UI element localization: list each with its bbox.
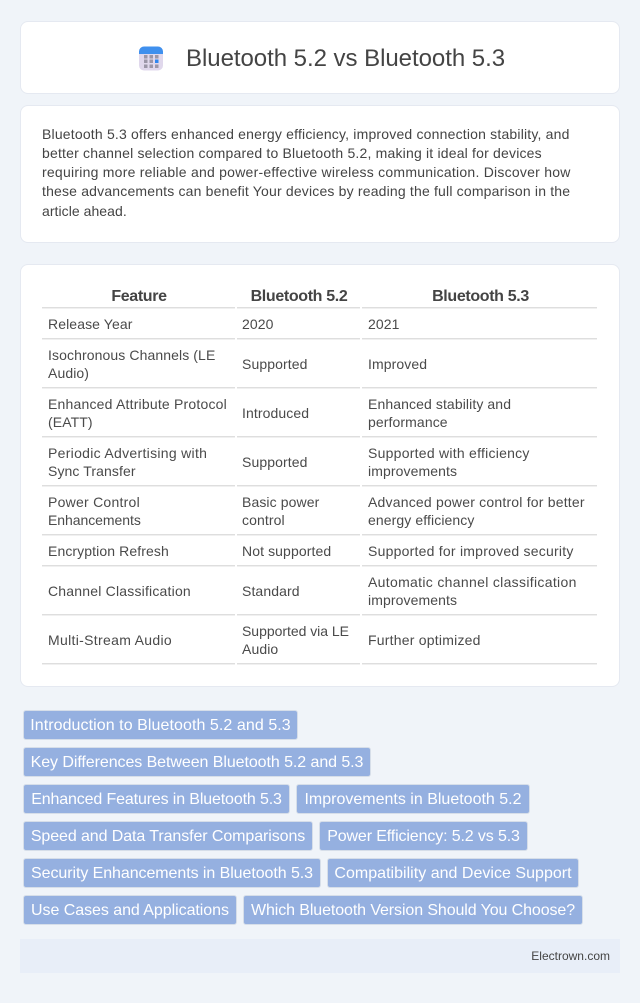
row: periodic advertising — [48, 445, 530, 479]
row: isochronous channels: Isochronous Channels (LE — [48, 347, 215, 363]
row: channel classification: Standard — [242, 583, 300, 599]
row: power control: control — [242, 512, 285, 528]
link: Enhanced Features in Bluetooth 5.3 — [31, 791, 282, 808]
row: enhanced attribute protocol — [48, 396, 511, 430]
row: periodic advertising: Supported with efficiency — [368, 445, 530, 461]
footer — [20, 939, 620, 973]
intro text: these advancements can benefit Your devices by reading the full comparison in the — [42, 183, 570, 199]
row: power control: Enhancements — [48, 512, 141, 528]
row: enhanced attribute protocol: (EATT) — [48, 414, 93, 430]
table header row — [111, 288, 529, 305]
row: multi-stream audio: Multi-Stream Audio — [48, 632, 172, 648]
link — [243, 895, 583, 925]
intro text: better channel selection compared to Bluetooth 5.2, making it ideal for devices — [42, 145, 542, 161]
row: channel classification: Channel Classification — [48, 583, 191, 599]
link — [23, 895, 237, 925]
row: channel classification: improvements — [368, 592, 457, 608]
intro panel — [20, 105, 620, 243]
row: enhanced attribute protocol: performance — [368, 414, 448, 430]
row: channel classification — [48, 574, 577, 608]
intro text — [42, 126, 571, 219]
link — [23, 710, 298, 740]
row: encryption refresh: Supported for improved security — [368, 543, 574, 559]
header panel — [20, 21, 620, 94]
row: multi-stream audio — [48, 623, 481, 657]
link — [23, 821, 313, 851]
row: encryption refresh: Encryption Refresh — [48, 543, 169, 559]
row: release year — [48, 316, 400, 332]
link: Improvements in Bluetooth 5.2 — [304, 791, 522, 808]
intro text: requiring more reliable and power-effective wireless communication. Discover how — [42, 164, 571, 180]
row: isochronous channels — [48, 347, 427, 381]
link: Compatibility and Device Support — [334, 865, 572, 882]
row: isochronous channels: Supported — [242, 356, 308, 372]
link — [23, 858, 321, 888]
row: periodic advertising: improvements — [368, 463, 457, 479]
row: release year: 2021 — [368, 316, 400, 332]
row: power control: Power Control — [48, 494, 140, 510]
link — [327, 858, 579, 888]
row: power control — [48, 494, 585, 528]
table header row: Bluetooth 5.3 — [432, 288, 529, 305]
panel: comparison table — [20, 264, 620, 687]
link: Security Enhancements in Bluetooth 5.3 — [31, 865, 313, 882]
link — [296, 784, 530, 814]
row: enhanced attribute protocol: Enhanced Attribute Protocol — [48, 396, 227, 412]
link: Use Cases and Applications — [31, 902, 229, 919]
link: Speed and Data Transfer Comparisons — [31, 828, 305, 845]
link — [23, 747, 371, 777]
row: channel classification: Automatic channel classification — [368, 574, 577, 590]
row: multi-stream audio: Audio — [242, 641, 278, 657]
row: encryption refresh: Not supported — [242, 543, 331, 559]
row: release year: Release Year — [48, 316, 132, 332]
link: Key Differences Between Bluetooth 5.2 and 5.3 — [31, 754, 363, 771]
row: isochronous channels: Improved — [368, 356, 427, 372]
row: periodic advertising: Sync Transfer — [48, 463, 136, 479]
link: Power Efficiency: 5.2 vs 5.3 — [327, 828, 520, 845]
link — [319, 821, 528, 851]
title: Bluetooth 5.2 vs Bluetooth 5.3 — [186, 45, 505, 72]
row: multi-stream audio: Supported via LE — [242, 623, 349, 639]
row: multi-stream audio: Further optimized — [368, 632, 481, 648]
link: Which Bluetooth Version Should You Choose? — [251, 902, 575, 919]
row: power control: energy efficiency — [368, 512, 475, 528]
table header row: Feature — [111, 288, 167, 305]
row: periodic advertising: Supported — [242, 454, 308, 470]
row: release year: 2020 — [242, 316, 274, 332]
topic link list — [23, 710, 583, 925]
row: power control: Basic power — [242, 494, 319, 510]
link — [23, 784, 290, 814]
footer site name: Electrown.com — [531, 949, 610, 963]
intro text: article ahead. — [42, 203, 127, 219]
row: isochronous channels: Audio) — [48, 365, 89, 381]
row: encryption refresh — [48, 543, 574, 559]
intro text: Bluetooth 5.3 offers enhanced energy efficiency, improved connection stability, and — [42, 126, 570, 142]
link: Introduction to Bluetooth 5.2 and 5.3 — [30, 717, 291, 734]
icon: calendar — [139, 46, 163, 70]
row: periodic advertising: Periodic Advertising with — [48, 445, 207, 461]
row: enhanced attribute protocol: Introduced — [242, 405, 309, 421]
row: enhanced attribute protocol: Enhanced stability and — [368, 396, 511, 412]
row: power control: Advanced power control for better — [368, 494, 585, 510]
table header row: Bluetooth 5.2 — [251, 288, 347, 305]
